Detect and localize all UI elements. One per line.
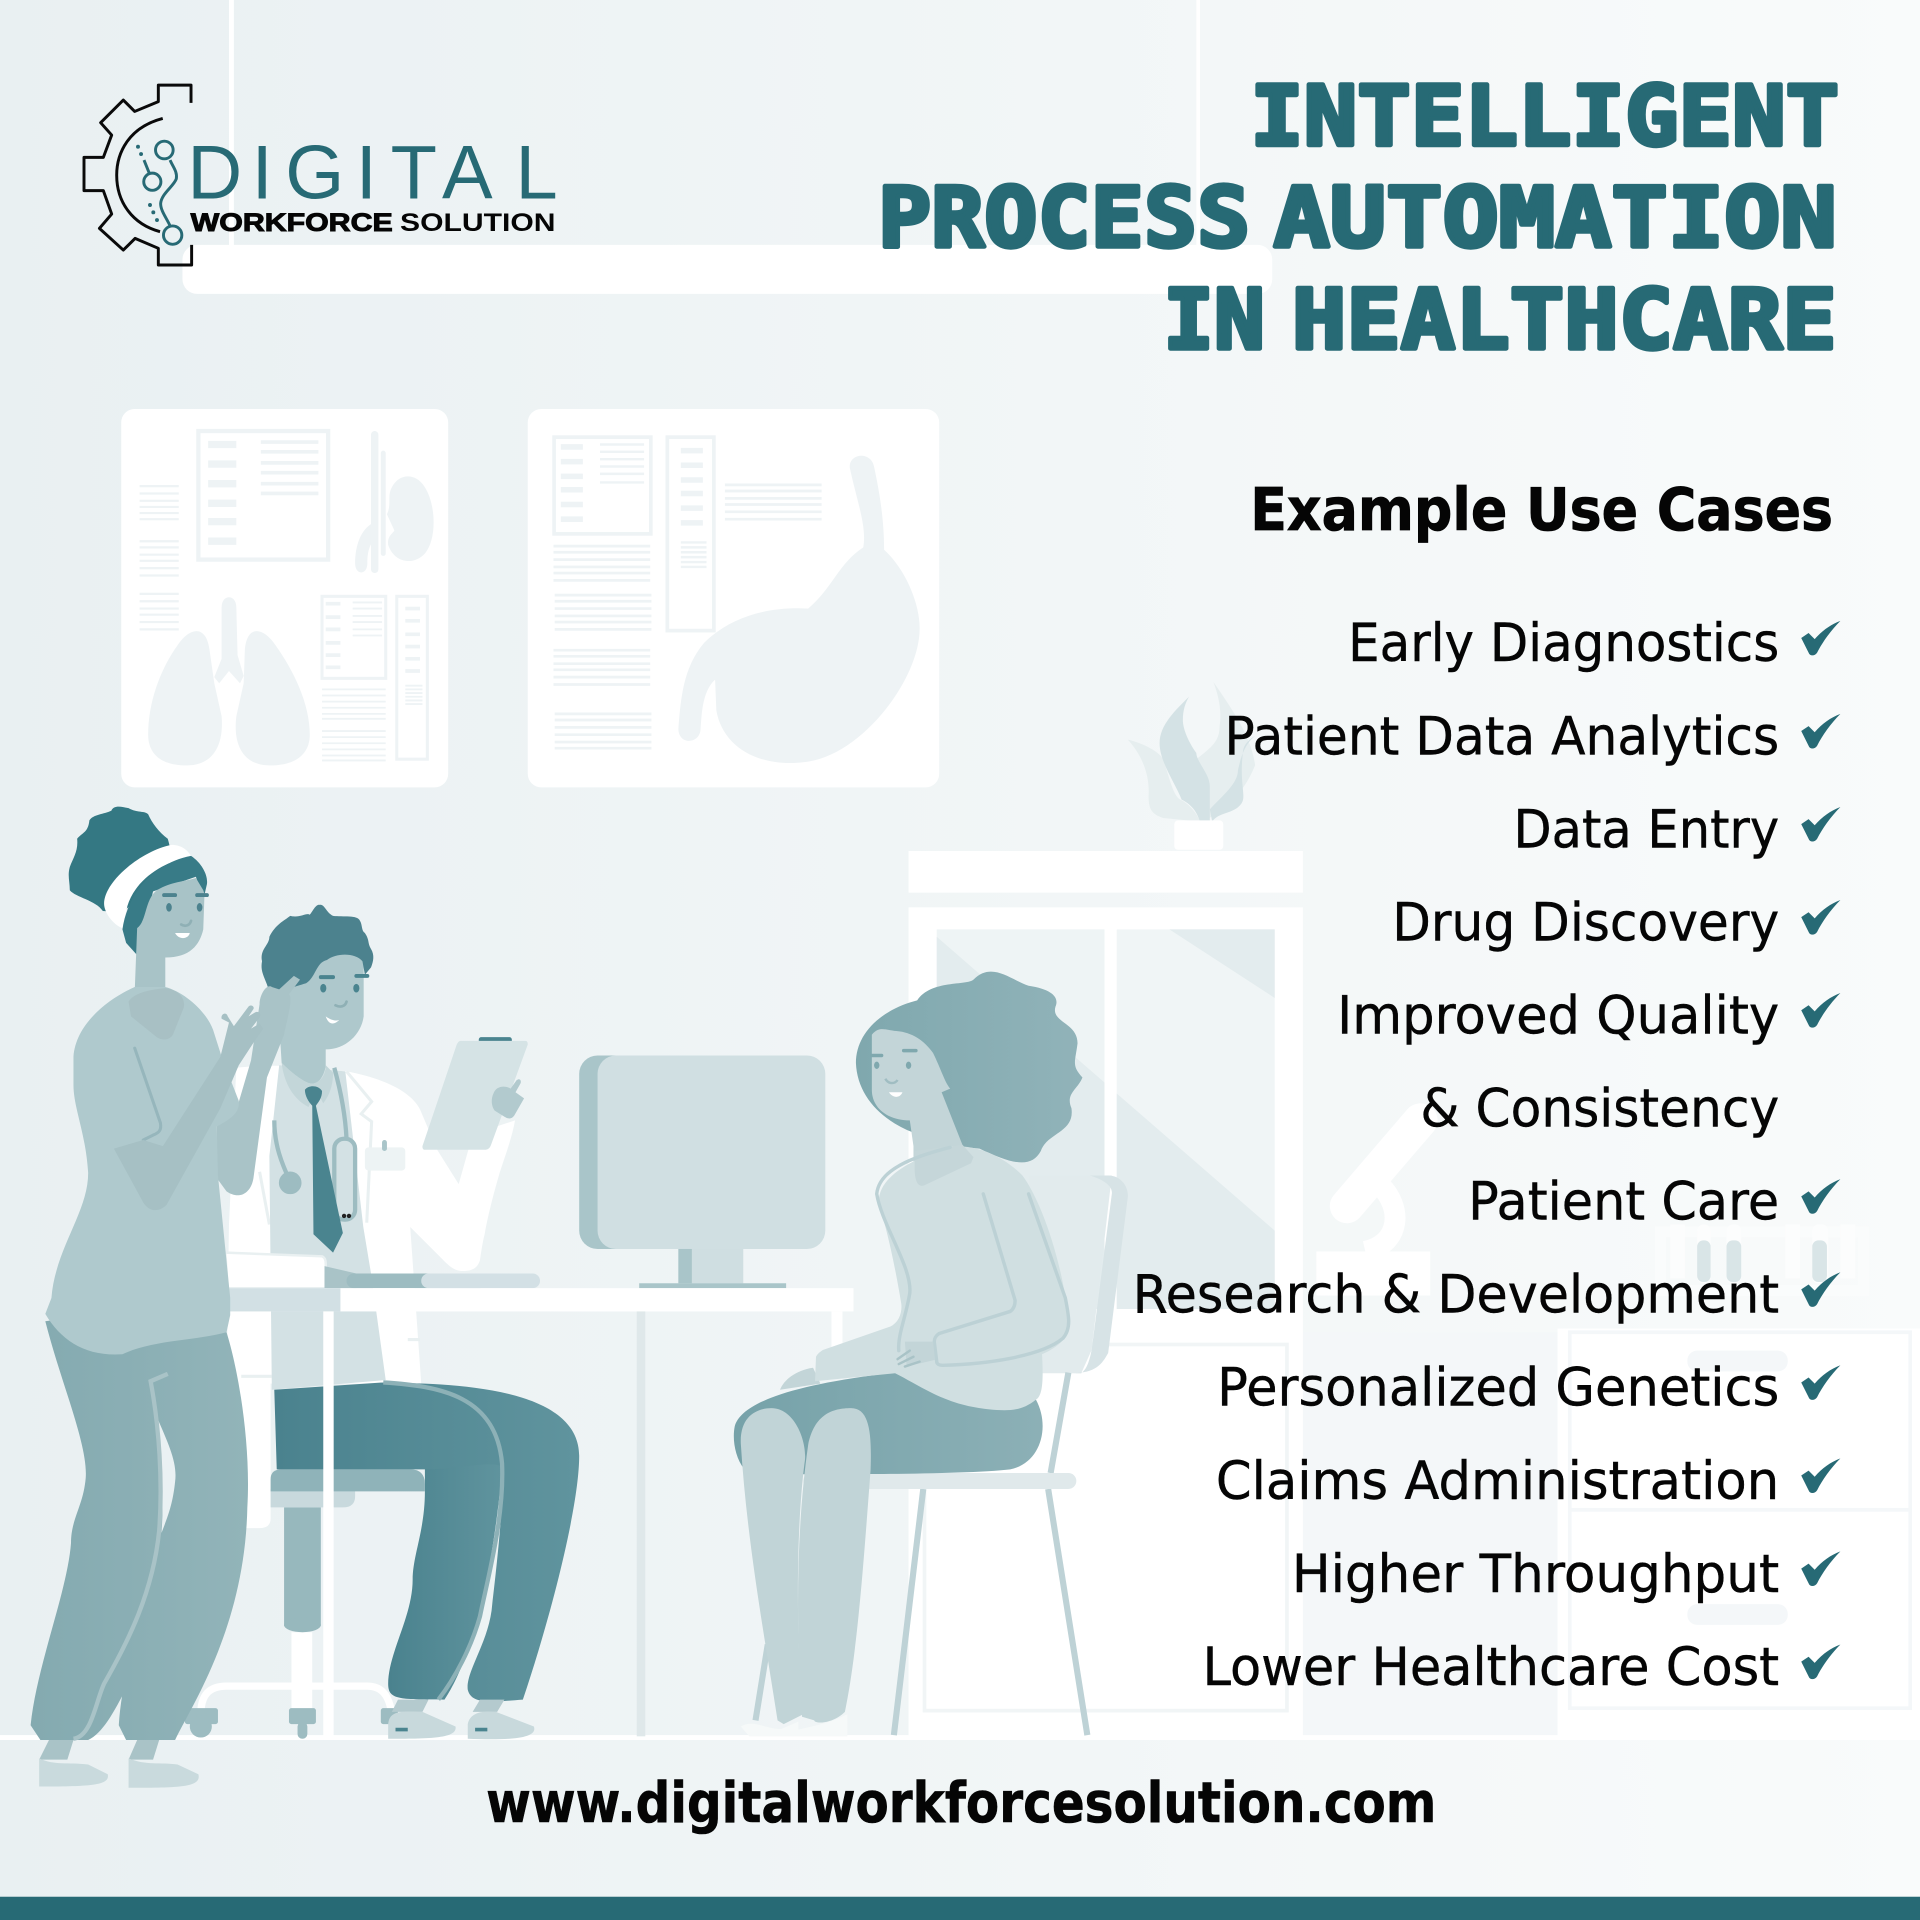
clipboard	[422, 1037, 528, 1150]
logo wordmark: DIGITAL	[187, 130, 558, 215]
icon: test tube rack	[1660, 1224, 1864, 1291]
logo: digital workforce solution	[84, 85, 558, 265]
patient hair	[856, 972, 1082, 1162]
title: INTELLIGENT	[1250, 68, 1839, 165]
cabinet with glass doors	[909, 851, 1303, 1736]
patient sweater	[815, 1146, 1069, 1410]
icon: potted plant	[1128, 682, 1255, 850]
stool seat	[271, 1469, 425, 1507]
doctor hair	[262, 905, 373, 998]
figure: nurse	[31, 807, 300, 1788]
patient face detail	[872, 1051, 916, 1097]
white lab coat	[227, 1066, 515, 1384]
title: PROCESS	[878, 170, 1250, 267]
doctor face	[320, 976, 367, 1023]
patient shoes	[741, 1714, 847, 1736]
sweater seams	[877, 1147, 1069, 1365]
title: IN	[1163, 271, 1265, 368]
icon: kidney	[355, 431, 434, 573]
title: HEALTHCARE	[1292, 271, 1837, 368]
use case list: Drug Discovery	[1392, 892, 1779, 953]
use case list: Patient Data Analytics	[1224, 706, 1779, 767]
nurse feet	[39, 1740, 199, 1788]
icon: check marks	[1801, 621, 1840, 1679]
patient chair	[756, 1176, 1128, 1735]
figure: seated doctor	[185, 905, 579, 1739]
sleeve seam	[135, 1048, 161, 1140]
nurse scrub top	[45, 987, 239, 1355]
floor	[0, 1735, 1920, 1898]
use case list: Claims Administration	[1216, 1451, 1779, 1512]
nurse hair bun	[69, 807, 170, 912]
nurse head and neck	[135, 878, 204, 992]
neckline	[129, 988, 184, 1039]
monitor	[579, 1056, 825, 1288]
patient hand	[898, 1342, 935, 1367]
website url: www.digitalworkforcesolution.com	[486, 1771, 1436, 1836]
use case list: & Consistency	[1420, 1079, 1779, 1140]
keyboard on desk	[324, 1266, 540, 1288]
nurse near arm	[114, 1006, 263, 1210]
nurse pants	[31, 1310, 248, 1740]
use case list: Early Diagnostics	[1348, 613, 1779, 674]
patient shorts	[734, 1373, 1043, 1474]
glass doors	[937, 929, 1104, 1309]
use case list	[1133, 613, 1779, 1698]
use case list: Higher Throughput	[1292, 1544, 1779, 1605]
title: AUTOMATION	[1273, 170, 1837, 267]
neck shadow	[915, 1145, 973, 1186]
title	[878, 68, 1839, 368]
nurse far arm and hand	[217, 976, 300, 1195]
necktie	[305, 1086, 343, 1253]
doctor trousers near leg	[274, 1382, 579, 1701]
panel: stomach x-ray board	[528, 409, 939, 787]
logo inner arc	[117, 118, 163, 232]
use case list: Patient Care	[1468, 1172, 1779, 1233]
use case list: Lower Healthcare Cost	[1202, 1637, 1779, 1698]
nurse face	[164, 895, 207, 938]
name badge	[365, 1140, 405, 1171]
doctor head and neck	[279, 945, 364, 1084]
icon: stomach	[678, 456, 920, 763]
doctor trousers far leg	[388, 1457, 503, 1700]
use case list: Data Entry	[1513, 799, 1779, 860]
patient legs	[741, 1408, 871, 1724]
nurse hair front	[122, 856, 207, 955]
lower right wall columns	[1303, 1329, 1920, 1736]
doctor shoes	[388, 1700, 534, 1739]
desk	[229, 1288, 853, 1736]
logo circuit	[136, 141, 182, 244]
logo tagline	[191, 209, 556, 237]
white headband	[104, 845, 191, 928]
logo tagline: WORKFORCE	[191, 209, 393, 237]
lower door	[924, 1344, 1287, 1711]
coat lapel lines	[241, 1071, 420, 1376]
patient lap shadow	[780, 1368, 820, 1390]
patient face and neck	[872, 1029, 973, 1188]
bottom bar	[0, 1897, 1920, 1920]
use case list: Research & Development	[1133, 1265, 1779, 1326]
use case list: Improved Quality	[1337, 985, 1779, 1046]
x-ray report sheet	[553, 437, 822, 748]
logo tagline: SOLUTION	[400, 209, 556, 237]
icon: lungs	[148, 597, 310, 765]
icon: microscope	[1316, 1120, 1430, 1296]
wall rail and shelf	[182, 0, 1272, 294]
shirt	[269, 1065, 386, 1390]
heading: example use cases: Example Use Cases	[1250, 475, 1833, 544]
stethoscope	[274, 1068, 355, 1220]
logo gear outline	[84, 85, 192, 265]
panel: kidney and lung x-ray board	[121, 409, 448, 787]
doctor hand	[492, 1079, 524, 1118]
figure: seated patient	[734, 972, 1128, 1736]
tablet on desk	[225, 1253, 326, 1288]
doctor stool	[185, 1371, 398, 1739]
use case list: Personalized Genetics	[1217, 1358, 1779, 1419]
collar	[282, 1063, 333, 1107]
x-ray report sheet	[140, 431, 427, 760]
